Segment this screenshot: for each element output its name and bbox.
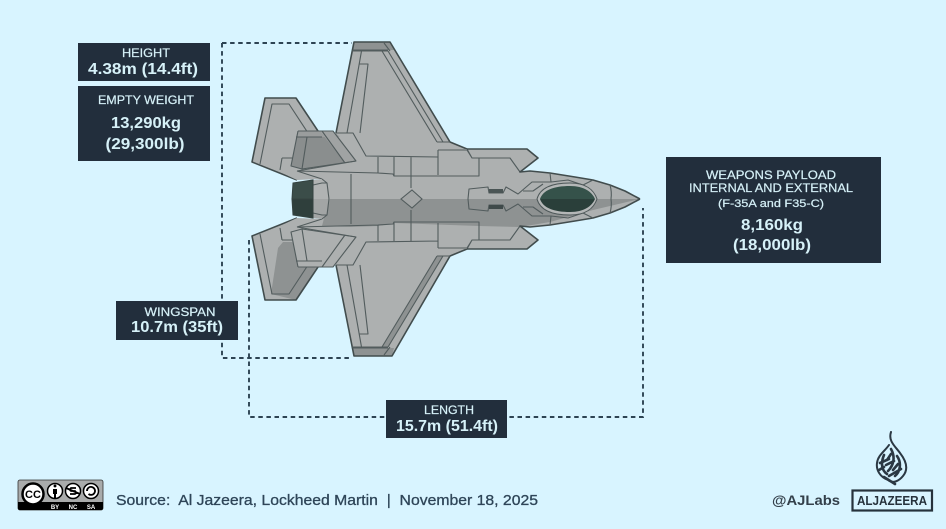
- handle: @AJLabs: [772, 492, 840, 508]
- callout: weapons payload: (18,000lb): [733, 237, 811, 254]
- callout: wingspan: WINGSPAN: [144, 305, 216, 319]
- callout: empty weight: EMPTY WEIGHT: [98, 93, 195, 107]
- icon: creative commons licence badge: NC: [69, 505, 78, 511]
- source line: Source: Al Jazeera, Lockheed Martin | November 18, 2025: [116, 492, 538, 509]
- callout: wingspan: 10.7m (35ft): [131, 319, 223, 336]
- icon: creative commons licence badge: CC: [25, 489, 41, 501]
- callout: length: 15.7m (51.4ft): [396, 418, 498, 435]
- icon: creative commons licence badge: [18, 480, 103, 511]
- callout: height: HEIGHT: [122, 46, 171, 60]
- cockpit canopy: [537, 183, 597, 215]
- callout: weapons payload: [666, 157, 881, 263]
- callout: empty weight: (29,300lb): [106, 136, 184, 153]
- logo: calligraphic drop: [877, 432, 906, 484]
- icon: creative commons licence badge: BY: [51, 505, 59, 511]
- callout: height: [78, 43, 210, 81]
- callout: weapons payload: (F-35A and F35-C): [718, 198, 824, 210]
- callout: height: 4.38m (14.4ft): [88, 61, 198, 78]
- diamond panel: [401, 190, 422, 208]
- callout: length: [386, 400, 507, 438]
- callout: weapons payload: INTERNAL AND EXTERNAL: [689, 181, 853, 195]
- callout: empty weight: [78, 86, 210, 161]
- callout: weapons payload: WEAPONS PAYLOAD: [706, 168, 836, 182]
- callout: wingspan: [116, 301, 238, 340]
- logo: Al Jazeera wordmark: ALJAZEERA: [857, 493, 928, 508]
- callout: length: LENGTH: [424, 403, 474, 417]
- logo: Al Jazeera wordmark: [852, 490, 932, 510]
- callout: empty weight: 13,290kg: [111, 115, 181, 132]
- F-35 aircraft plan view: [252, 42, 640, 356]
- icon: creative commons licence badge: SA: [87, 505, 96, 511]
- callout: weapons payload: 8,160kg: [741, 217, 803, 234]
- upper half of aircraft: [252, 42, 640, 199]
- lower half of aircraft: [252, 199, 640, 356]
